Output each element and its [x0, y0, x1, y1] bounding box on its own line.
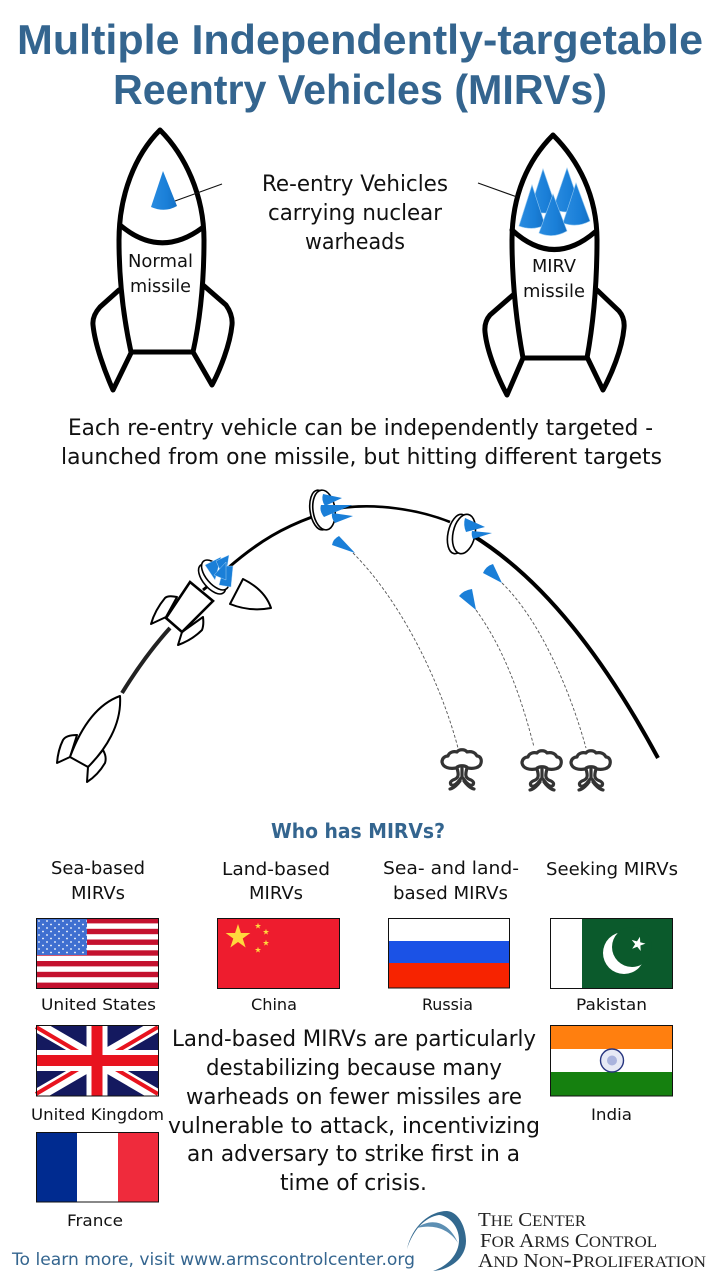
MIRV missile diagram	[478, 135, 624, 395]
column heading: sea and land: Sea- and land-	[383, 858, 519, 879]
normal missile diagram	[93, 130, 232, 390]
column heading: land-based	[222, 859, 330, 904]
icon: five re-entry vehicle cones	[519, 168, 590, 236]
title: Multiple Independently-targetable	[17, 16, 703, 63]
text block: land-based MIRVs explanation: Land-based MIRVs are particularly	[172, 1027, 536, 1052]
callout: re-entry vehicles: carrying nuclear	[268, 201, 443, 226]
falling warhead 2	[483, 564, 502, 583]
label: MIRV missile: MIRV	[532, 256, 577, 277]
label: normal missile	[128, 251, 193, 297]
flag: United States	[36, 918, 158, 988]
flag: France	[36, 1132, 159, 1202]
label: normal missile: missile	[130, 276, 191, 297]
label: MIRV missile: missile	[523, 281, 585, 302]
text block: land-based MIRVs explanation	[168, 1027, 540, 1196]
trajectory diagram	[57, 489, 658, 790]
logo wordmark: For Arms Control	[480, 1227, 657, 1252]
logo wordmark: The Center	[478, 1206, 586, 1231]
text block: land-based MIRVs explanation: destabilizing because many	[206, 1056, 502, 1081]
icon: launching rocket	[57, 696, 120, 782]
icon: bus with two warheads	[444, 512, 492, 556]
warhead dashed paths	[353, 553, 586, 748]
icon: detached nose cone	[230, 579, 271, 609]
falling warhead 1	[332, 536, 355, 553]
callout: re-entry vehicles: Re-entry Vehicles	[262, 172, 448, 197]
flight path arc	[122, 506, 658, 758]
logo wordmark	[478, 1206, 706, 1272]
falling warhead 3	[459, 589, 476, 610]
text block: land-based MIRVs explanation: warheads on fewer missiles are	[186, 1085, 522, 1110]
text block: land-based MIRVs explanation: vulnerable to attack, incentivizing	[168, 1114, 540, 1139]
label: France: France	[67, 1211, 123, 1230]
label: United Kingdom: United Kingdom	[31, 1105, 164, 1124]
icon: normal missile outline	[93, 130, 232, 390]
flag: Pakistan	[550, 918, 673, 988]
column heading: sea-based: Sea-based	[51, 858, 145, 879]
icon: mushroom cloud 1	[442, 750, 481, 789]
title: Reentry Vehicles (MIRVs)	[113, 66, 607, 113]
column heading: sea-based: MIRVs	[71, 883, 125, 904]
column heading: sea-based	[51, 858, 145, 904]
label: United States: United States	[41, 995, 156, 1014]
explanatory sentence	[61, 416, 662, 470]
callout: re-entry vehicles	[262, 172, 448, 255]
flag: India	[550, 1025, 673, 1096]
footer link: To learn more, visit www.armscontrolcenter.org	[11, 1250, 415, 1270]
icon: bus with three warheads	[307, 489, 353, 531]
logo: center for arms control	[407, 1206, 706, 1272]
label: China: China	[251, 995, 297, 1014]
icon: mushroom cloud 2	[522, 751, 561, 790]
label: India: India	[591, 1105, 632, 1124]
icon: bus with five warheads	[194, 555, 233, 599]
explanatory sentence: launched from one missile, but hitting different targets	[61, 445, 662, 470]
column heading: seeking: Seeking MIRVs	[546, 859, 678, 880]
heading: who has MIRVs: Who has MIRVs?	[271, 819, 445, 843]
logo mark	[407, 1211, 466, 1271]
leader line: MIRV missile	[478, 183, 517, 197]
text block: land-based MIRVs explanation: an adversary to strike first in a	[187, 1142, 520, 1167]
leader line: normal missile	[175, 184, 222, 201]
icon: MIRV missile outline	[485, 135, 624, 395]
column heading: land-based: Land-based	[222, 859, 330, 880]
callout: re-entry vehicles: warheads	[305, 230, 405, 255]
label: Pakistan: Pakistan	[576, 995, 647, 1014]
title	[17, 16, 703, 113]
explanatory sentence: Each re-entry vehicle can be independently targeted -	[68, 416, 653, 441]
column heading: sea and land	[383, 858, 519, 904]
flag: United Kingdom	[36, 1025, 158, 1096]
icon: single re-entry vehicle cone	[151, 171, 177, 210]
icon: separating rocket body	[151, 582, 213, 645]
label: normal missile: Normal	[128, 251, 193, 272]
logo wordmark: And Non-Proliferation	[478, 1247, 706, 1272]
flag: China	[217, 918, 340, 988]
column heading: sea and land: based MIRVs	[393, 883, 508, 904]
flag: Russia	[388, 918, 510, 988]
label: Russia: Russia	[422, 995, 473, 1014]
column heading: land-based: MIRVs	[249, 883, 303, 904]
label: MIRV missile	[523, 256, 585, 302]
text block: land-based MIRVs explanation: time of crisis.	[280, 1171, 427, 1196]
icon: mushroom cloud 3	[571, 751, 610, 790]
